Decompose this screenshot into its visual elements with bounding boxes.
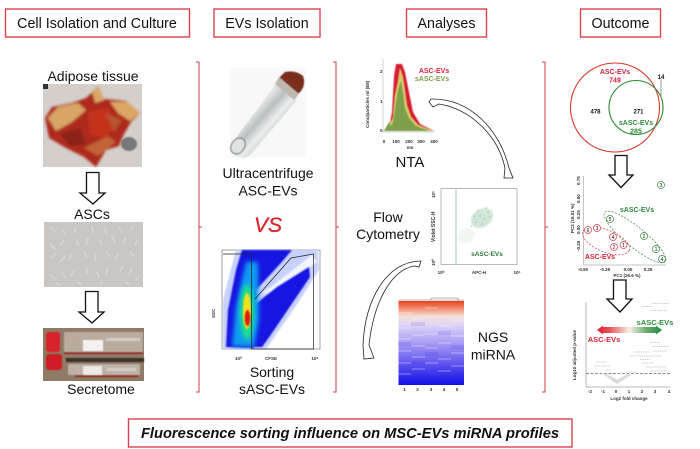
label: Secretome: Secretome — [67, 381, 135, 397]
label: Flow Cytometry: Cytometry — [356, 226, 420, 242]
label: NGS miRNA — [471, 329, 516, 362]
chart: PCA plot: 0.50 — [576, 194, 581, 203]
chart: NTA size distribution: 0 — [383, 139, 386, 144]
chart: Venn diagram: sASC-EVs — [619, 120, 653, 127]
chart: PCA plot — [570, 176, 672, 278]
chart: NTA size distribution: sASC-EVs — [415, 76, 449, 83]
chart: flow cytometry scatter: 10⁵ — [513, 270, 521, 275]
chart: volcano plot: 0 — [615, 389, 618, 394]
chart: miRNA heatmap: 1 — [403, 387, 406, 392]
label: Flow Cytometry — [356, 209, 420, 242]
chart: PCA plot: 4 — [661, 257, 664, 263]
chart: flow cytometry scatter: Violet SSC-H — [431, 211, 437, 242]
bracket: cell culture to isolation — [196, 62, 202, 392]
chart: volcano plot: -2 — [588, 389, 592, 394]
label: Sorting sASC-EVs: Sorting — [250, 364, 294, 380]
chart: Venn diagram: 271 — [633, 110, 644, 116]
chart: NTA size distribution — [365, 59, 449, 150]
chart: Venn diagram: ASC-EVs — [600, 69, 630, 76]
chart: miRNA heatmap: 5 — [456, 387, 459, 392]
chart: volcano plot: 4 — [668, 389, 671, 394]
chart: PCA plot: 4 — [612, 235, 615, 241]
chart: PCA plot: PC1 (26.6 %) — [613, 273, 641, 278]
chart: PCA plot: 0.25 — [644, 267, 653, 272]
chart: PCA plot: 0.00 — [624, 267, 633, 272]
chart: volcano plot: Log10 adjusted p-value — [572, 329, 577, 380]
arrow: NTA to flow cytometry — [429, 99, 513, 178]
chart: volcano plot: -1 — [601, 389, 605, 394]
heading: Analyses: Analyses — [417, 16, 476, 32]
arrow: flow cytometry to NGS — [363, 261, 421, 359]
chart: sorting flow cytometry density: SSC — [211, 308, 216, 318]
photo: ASC cell culture — [44, 222, 143, 287]
chart: NTA size distribution: 300 — [417, 139, 425, 144]
chart: PCA plot: 6 — [587, 228, 590, 234]
heading: Analyses — [406, 9, 486, 37]
chart: miRNA heatmap: 2 — [416, 387, 419, 392]
chart: miRNA heatmap — [398, 298, 464, 392]
chart: NTA size distribution: ASC-EVs — [419, 68, 449, 75]
chart: NTA size distribution: nm — [407, 145, 413, 150]
chart: sorting flow cytometry density: 10⁴ — [311, 356, 319, 361]
chart: volcano plot: ASC-EVs — [588, 335, 620, 344]
chart: Venn diagram: 14 — [658, 75, 665, 81]
arrow: Venn to PCA — [609, 156, 633, 188]
photo: adipose tissue — [43, 84, 142, 167]
arrow: tissue to ASCs — [80, 172, 105, 204]
label: NTA: NTA — [396, 154, 424, 171]
chart: sorting flow cytometry density: CFSE — [265, 356, 277, 361]
banner: Fluorescence sorting conclusion — [128, 419, 572, 447]
heading: Outcome — [580, 9, 660, 37]
chart: Venn diagram — [570, 63, 665, 152]
chart: NTA size distribution: 400 — [430, 139, 438, 144]
photo: ultracentrifuge tube — [228, 68, 306, 158]
chart: PCA plot: sASC-EVs — [620, 207, 654, 214]
chart: PCA plot: 1 — [622, 243, 625, 249]
chart: PCA plot: -0.50 — [578, 267, 589, 272]
chart: NTA size distribution: 2 — [380, 69, 383, 74]
chart: volcano plot: 3 — [654, 389, 657, 394]
label: Ultracentrifuge ASC-EVs: Ultracentrifuge — [222, 165, 314, 181]
photo: secretome flasks — [43, 328, 144, 381]
label: NGS miRNA: NGS — [478, 329, 508, 345]
chart: volcano plot: 2 — [641, 389, 644, 394]
chart: sorting flow cytometry density: 10⁰ — [235, 356, 242, 361]
label: Adipose tissue: Adipose tissue — [47, 68, 139, 84]
label: Sorting sASC-EVs: sASC-EVs — [239, 381, 305, 397]
chart: flow cytometry scatter: APC-H — [472, 270, 486, 275]
chart: PCA plot: 1 — [655, 247, 658, 253]
banner: Fluorescence sorting conclusion: Fluorescence sorting influence on MSC-EVs miRNA profiles — [141, 426, 559, 442]
chart: PCA plot: 2 — [613, 245, 616, 251]
chart: miRNA heatmap: 3 — [430, 387, 433, 392]
chart: flow cytometry scatter — [431, 188, 521, 275]
chart: NTA size distribution: Conc/particles ml (E8) — [365, 80, 370, 128]
arrow: ASCs to secretome — [79, 292, 104, 323]
label: ASCs: ASCs — [74, 206, 110, 222]
chart: PCA plot: PC2 (18.51 %) — [570, 203, 575, 233]
chart: flow cytometry scatter: 10⁵ — [431, 191, 436, 198]
label: VS: VS — [254, 214, 282, 237]
arrow: PCA to volcano — [607, 280, 632, 312]
chart: PCA plot: 3 — [596, 226, 599, 232]
heading: Cell Isolation and Culture: Cell Isolation and Culture — [17, 16, 177, 32]
chart: NTA size distribution: 200 — [405, 139, 413, 144]
chart: volcano plot — [572, 302, 673, 401]
label: Ultracentrifuge ASC-EVs: ASC-EVs — [238, 182, 298, 198]
chart: NTA size distribution: 100 — [392, 139, 400, 144]
chart: volcano plot: Log2 fold change — [610, 396, 648, 401]
chart: flow cytometry scatter: 10⁰ — [438, 270, 445, 275]
chart: Venn diagram: 478 — [590, 110, 601, 116]
chart: sorting flow cytometry density — [211, 250, 320, 361]
chart: flow cytometry scatter: 10⁰ — [431, 259, 436, 266]
chart: PCA plot: ASC-EVs — [585, 254, 615, 261]
label: Flow Cytometry: Flow — [373, 209, 404, 225]
chart: PCA plot: 2 — [643, 234, 646, 240]
heading: EVs Isolation — [214, 9, 320, 37]
bracket: isolation to analyses — [333, 62, 339, 392]
bracket: analyses to outcome — [542, 62, 548, 392]
chart: volcano plot: sASC-EVs — [637, 318, 673, 327]
chart: NTA size distribution: 1 — [380, 99, 383, 104]
chart: PCA plot: -0.25 — [576, 240, 581, 251]
label: Ultracentrifuge ASC-EVs — [222, 165, 314, 198]
label: NGS miRNA: miRNA — [471, 346, 516, 362]
chart: miRNA heatmap: 4 — [443, 387, 446, 392]
chart: volcano plot: 1 — [628, 389, 631, 394]
chart: Venn diagram: 285 — [630, 128, 642, 136]
chart: PCA plot: 0.25 — [576, 210, 581, 219]
chart: Venn diagram: 749 — [609, 78, 621, 84]
chart: NTA size distribution: 0 — [380, 128, 383, 133]
heading: Cell Isolation and Culture — [6, 9, 190, 37]
chart: PCA plot: 0.00 — [576, 225, 581, 234]
heading: Outcome: Outcome — [591, 16, 650, 32]
chart: PCA plot: -0.25 — [600, 267, 611, 272]
chart: flow cytometry scatter: sASC-EVs — [471, 251, 503, 258]
chart: PCA plot: 0.75 — [576, 176, 581, 185]
label: Sorting sASC-EVs — [239, 364, 305, 397]
chart: PCA plot: 3 — [660, 183, 663, 189]
heading: EVs Isolation: EVs Isolation — [225, 16, 309, 32]
chart: PCA plot: 5 — [609, 217, 612, 223]
